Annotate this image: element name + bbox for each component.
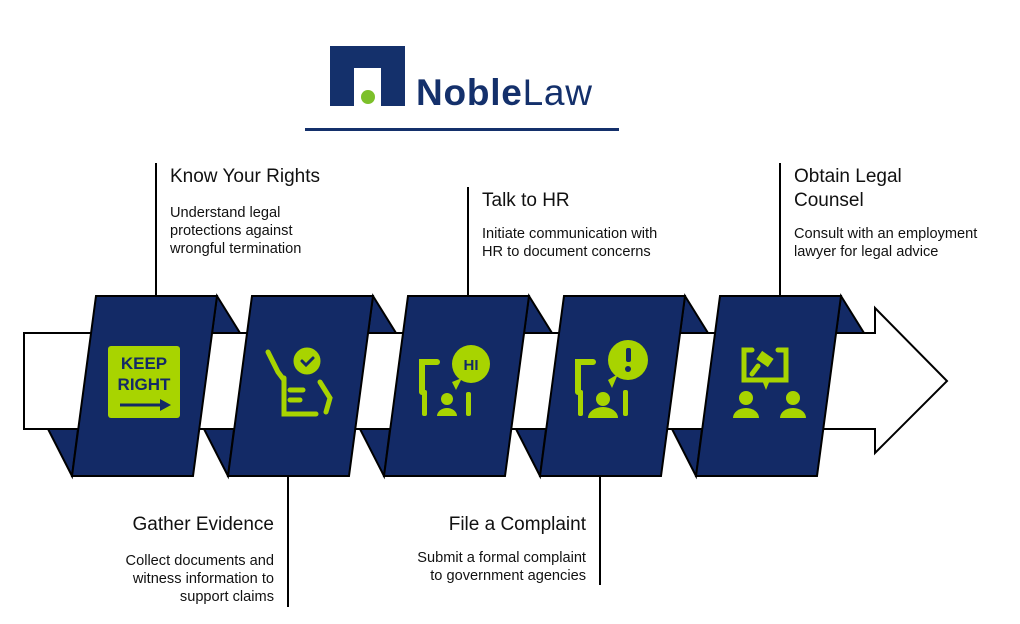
- icon: legal counsel: [733, 350, 806, 418]
- panel 1: [48, 296, 240, 476]
- panel 2: [204, 296, 396, 476]
- text: Consult with an employment: [794, 226, 977, 242]
- icon: logo mark: [330, 46, 405, 106]
- logo: [330, 46, 592, 110]
- panel 4: [516, 296, 708, 476]
- text: protections against: [170, 223, 293, 239]
- text: Understand legal: [170, 205, 280, 221]
- text: witness information to: [133, 571, 274, 587]
- text: Collect documents and: [126, 553, 274, 569]
- step 4: File a Complaint: [417, 477, 601, 585]
- arrow band: [24, 308, 947, 453]
- panel 3: [360, 296, 552, 476]
- text: HR to document concerns: [482, 244, 651, 260]
- text: Counsel: [794, 190, 864, 211]
- panel 5: [672, 296, 864, 476]
- text: Know Your Rights: [170, 166, 320, 187]
- step 1: Know Your Rights: [155, 163, 320, 295]
- step 3: Talk to HR: [467, 187, 657, 295]
- text: wrongful termination: [170, 241, 301, 257]
- text: Gather Evidence: [132, 514, 274, 535]
- text: lawyer for legal advice: [794, 244, 938, 260]
- text: Talk to HR: [482, 190, 570, 211]
- icon: keep right sign: [108, 346, 180, 418]
- text: to government agencies: [430, 568, 586, 584]
- text: support claims: [180, 589, 274, 605]
- text: Initiate communication with: [482, 226, 657, 242]
- step 2: Gather Evidence: [126, 477, 289, 607]
- step 5: Obtain Legal Counsel: [779, 163, 978, 295]
- icon: HR talk: HI: [464, 357, 478, 374]
- icon: evidence clipboard with hands: [268, 350, 330, 414]
- icon: keep right sign: RIGHT: [118, 375, 171, 394]
- icon: HR talk: [422, 345, 490, 416]
- icon: keep right sign: KEEP: [121, 354, 167, 373]
- text: File a Complaint: [449, 514, 586, 535]
- text: Submit a formal complaint: [417, 550, 586, 566]
- text: Obtain Legal: [794, 166, 902, 187]
- icon: complaint: [578, 340, 648, 418]
